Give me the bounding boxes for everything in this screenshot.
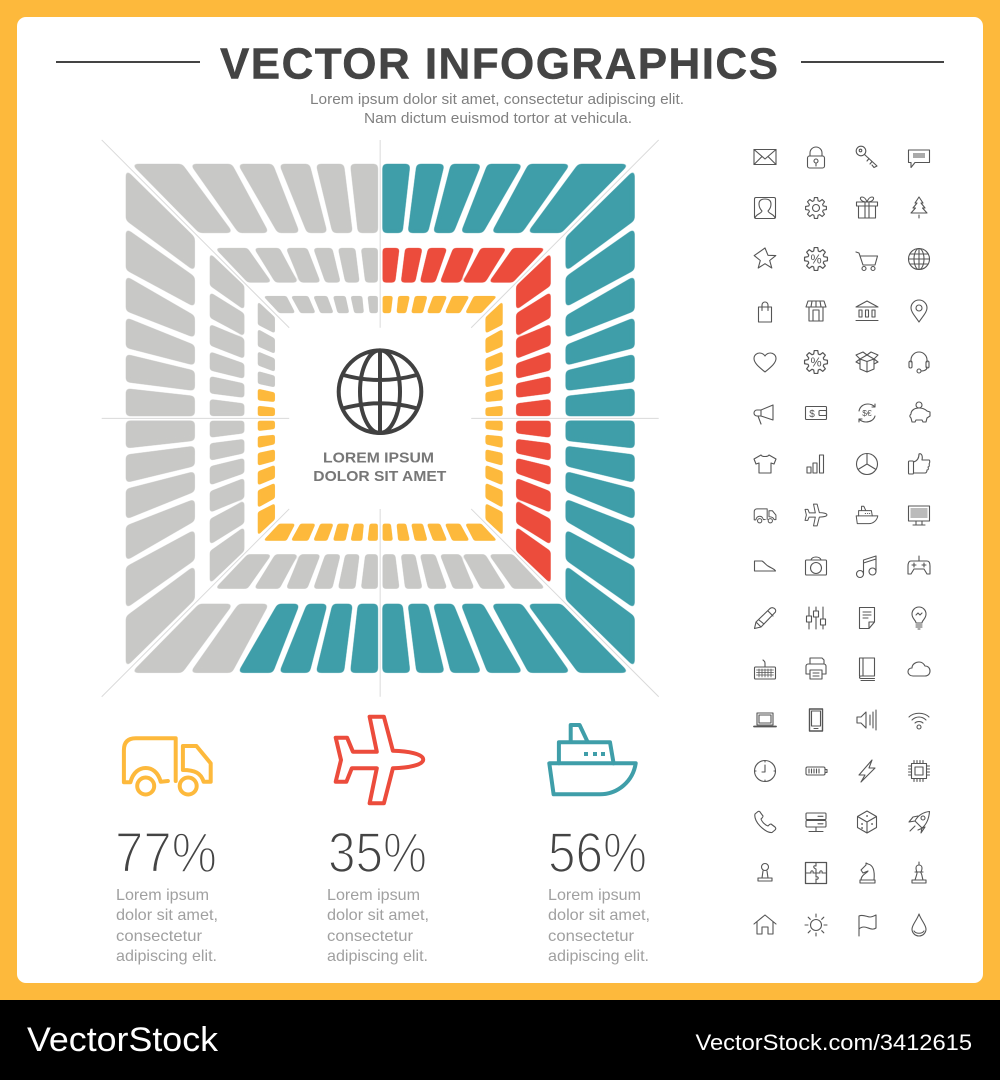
icon: cart [856, 252, 878, 270]
icon: clock [754, 760, 776, 782]
icon: small plane [805, 504, 827, 526]
icon: tree [911, 197, 927, 218]
icon: discount badge [805, 351, 827, 373]
subtitle: Nam dictum euismod tortor at vehicula. [364, 110, 632, 127]
icon: battery [806, 767, 827, 775]
subtitle [310, 91, 684, 127]
description: consectetur [327, 928, 414, 945]
footer id: VectorStock.com/3412615 [696, 1030, 972, 1055]
icon: gear [806, 198, 826, 218]
icon: speaker [857, 710, 876, 730]
icon: sun [805, 914, 827, 936]
icon: sliders [806, 607, 826, 629]
icon: bar chart [807, 455, 824, 473]
icon: gift [856, 197, 878, 218]
icon: gamepad [908, 556, 930, 574]
stat: ship 56% [548, 725, 650, 965]
icon: pencil [754, 608, 776, 628]
icon: chess bishop [912, 862, 926, 883]
icon: ship [549, 725, 636, 794]
subtitle: Lorem ipsum dolor sit amet, consectetur adipiscing elit. [310, 91, 684, 108]
icon: keyboard [754, 660, 776, 679]
stat: plane 35% [327, 717, 429, 965]
icon: key [856, 146, 877, 168]
icon: home [754, 915, 776, 934]
description: adipiscing elit. [327, 948, 428, 965]
description: Lorem ipsum [116, 887, 209, 904]
icon: discount badge [805, 248, 827, 270]
icon: currency exchange [859, 404, 875, 422]
icon: t-shirt [754, 455, 776, 473]
title: VECTOR INFOGRAPHICS [220, 39, 778, 88]
icon: book [860, 658, 874, 680]
icon: plane [336, 717, 423, 803]
icon: document [860, 608, 874, 628]
percent value: 77% [115, 821, 217, 885]
description: dolor sit amet, [548, 907, 650, 924]
description: Lorem ipsum [327, 887, 420, 904]
icon: printer [806, 658, 826, 679]
description [548, 887, 650, 965]
icon: user [754, 198, 776, 218]
middle ring [210, 248, 551, 589]
center label: LOREM IPSUM [323, 449, 434, 466]
icon: chip [908, 760, 930, 782]
icon: puzzle [806, 862, 826, 884]
icon: mail [754, 150, 776, 164]
description: consectetur [548, 928, 635, 945]
icon: wallet: $ [809, 409, 815, 420]
icon: small truck [754, 509, 776, 523]
footer bar [0, 1000, 1000, 1080]
icon: central globe [339, 350, 421, 433]
icon: store [806, 301, 826, 321]
description: adipiscing elit. [116, 948, 217, 965]
percent value: 56% [548, 821, 647, 885]
icon: star [754, 248, 776, 268]
icon: megaphone [754, 405, 773, 424]
percent value: 35% [328, 821, 427, 885]
icon: water drop [912, 914, 926, 936]
inner ring [258, 296, 502, 541]
icon: shopping bag [758, 302, 772, 322]
icon: discount badge: % [810, 252, 822, 266]
icon: mobile phone [810, 709, 822, 731]
icon: pie chart [856, 454, 878, 474]
description: consectetur [116, 928, 203, 945]
icon: lock [808, 147, 824, 168]
center label: DOLOR SIT AMET [313, 468, 446, 485]
icon: rocket [909, 812, 930, 833]
icon: telephone handset [755, 811, 776, 833]
description: dolor sit amet, [116, 907, 218, 924]
description: dolor sit amet, [327, 907, 429, 924]
footer logo: VectorStock [27, 1021, 219, 1059]
icon: map pin [911, 300, 927, 322]
icon: heart [754, 353, 776, 372]
icon: wifi [909, 713, 929, 729]
icon: laptop [754, 713, 776, 726]
icon: cloud [908, 662, 930, 676]
icon: small ship [856, 506, 878, 524]
icon: lightning bolt [859, 760, 875, 782]
icon: truck [124, 738, 211, 794]
icon: open box [856, 352, 878, 372]
icon: chess knight [860, 863, 875, 883]
icon grid [754, 146, 930, 936]
icon: shoe [754, 561, 776, 571]
icon: headset [909, 352, 929, 373]
icon: camera [806, 557, 826, 575]
radial square chart [102, 140, 659, 697]
icon: speech bubble [908, 150, 930, 168]
icon: piggy bank [910, 402, 930, 422]
icon: wallet [806, 406, 826, 420]
center label [313, 449, 446, 485]
description [327, 887, 429, 965]
description: adipiscing elit. [548, 948, 649, 965]
icon: light bulb [912, 607, 926, 629]
stat: truck 77% [115, 738, 218, 965]
description: Lorem ipsum [548, 887, 641, 904]
icon: server [806, 813, 826, 832]
icon: monitor [908, 506, 930, 525]
icon: pawn [758, 864, 772, 881]
icon: music note [856, 556, 876, 578]
icon: bank [856, 301, 878, 320]
outer ring [126, 164, 634, 673]
icon: currency exchange: $€ [862, 408, 872, 418]
icon: flag [859, 915, 876, 936]
icon: thumbs up [908, 454, 930, 474]
description [116, 887, 218, 965]
icon: dice [858, 811, 876, 833]
icon: globe [908, 248, 930, 270]
icon: discount badge: % [810, 356, 822, 370]
